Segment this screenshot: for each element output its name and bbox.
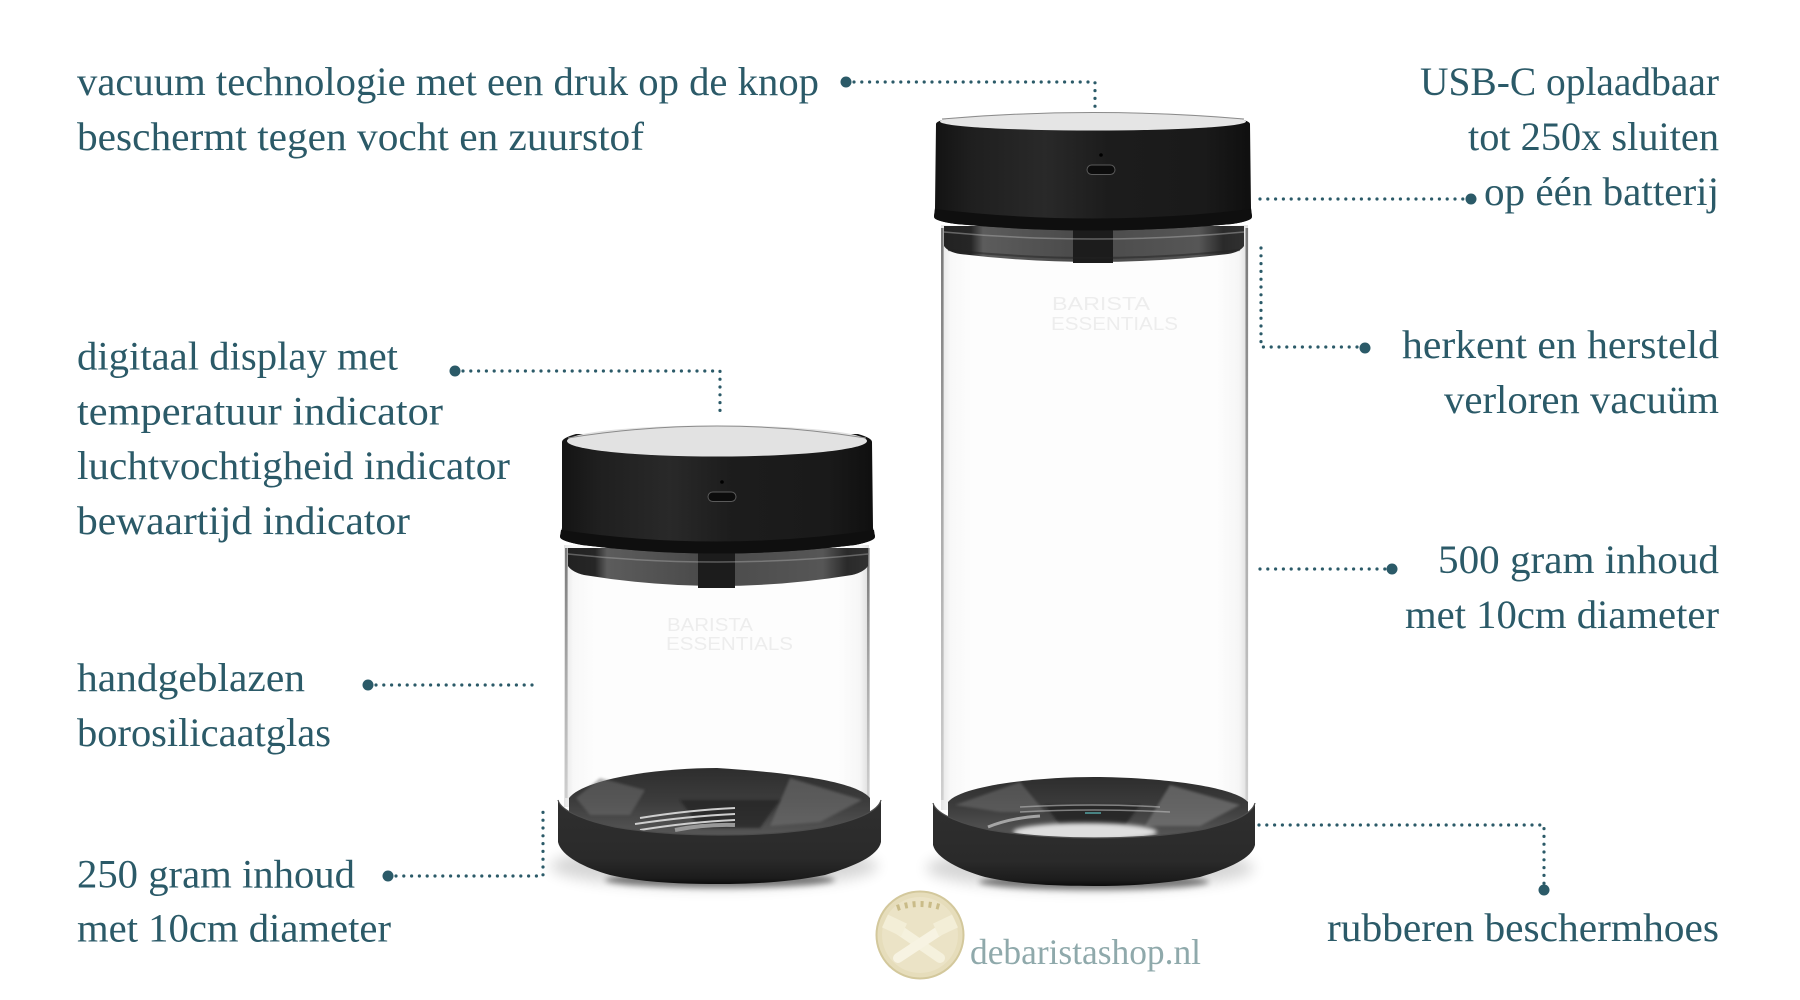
text block: handgeblazen xyxy=(77,655,305,700)
glass brand text xyxy=(666,615,793,654)
callout: recover vacuum xyxy=(1261,248,1719,422)
glass body xyxy=(941,225,1248,810)
leader line xyxy=(450,366,720,411)
callout: hand blown glass xyxy=(77,655,533,755)
icon: gold coin with crossed tampers xyxy=(876,892,964,978)
text block: verloren vacuüm xyxy=(1444,377,1719,422)
text block: 500 gram inhoud xyxy=(1438,537,1719,582)
callout: digital display xyxy=(77,334,720,543)
callout: vacuum technology xyxy=(77,59,1095,159)
lid seal band xyxy=(944,226,1244,263)
leader line xyxy=(1260,564,1398,574)
text block: op één batterij xyxy=(1484,169,1719,214)
text block: USB-C oplaadbaar xyxy=(1420,59,1719,104)
jar shadow xyxy=(926,846,1254,890)
leader line xyxy=(1260,194,1476,204)
text block xyxy=(1420,59,1719,214)
text block: met 10cm diameter xyxy=(1405,592,1719,637)
logo text: debaristashop.nl xyxy=(970,932,1201,972)
text block: borosilicaatglas xyxy=(77,710,331,755)
text block: met 10cm diameter xyxy=(77,906,391,950)
callout: rubber cover xyxy=(1259,825,1719,950)
small jar 250 gram xyxy=(550,426,881,888)
jar shadow xyxy=(550,844,878,888)
text block: 250 gram inhoud xyxy=(77,852,355,896)
text block: temperatuur indicator xyxy=(77,388,443,434)
base interior xyxy=(948,777,1248,845)
text block xyxy=(77,334,510,543)
text block: herkent en hersteld xyxy=(1402,322,1719,367)
tall jar 500 gram xyxy=(926,112,1255,890)
leader line xyxy=(382,812,543,882)
text block xyxy=(77,655,331,755)
text block: digitaal display met xyxy=(77,334,398,378)
text block xyxy=(1405,537,1719,637)
text block: vacuum technologie met een druk op de knop xyxy=(77,59,819,104)
logo: debaristashop xyxy=(876,892,1201,978)
text block: luchtvochtigheid indicator xyxy=(77,443,510,488)
rubber base xyxy=(558,800,881,884)
text block xyxy=(77,852,391,950)
text block: rubberen beschermhoes xyxy=(1327,905,1719,950)
glass brand text: BARISTA xyxy=(667,615,753,635)
text block: beschermt tegen vocht en zuurstof xyxy=(77,114,645,159)
leader line xyxy=(1261,248,1370,354)
base interior xyxy=(569,768,870,845)
lid xyxy=(934,112,1252,230)
text block xyxy=(1402,322,1719,422)
callout: USB-C xyxy=(1260,59,1719,214)
glass brand text: BARISTA xyxy=(1052,294,1150,314)
glass brand text: ESSENTIALS xyxy=(666,634,793,654)
callout: 500 gram xyxy=(1260,537,1719,637)
glass brand text xyxy=(1051,294,1178,334)
leader line xyxy=(362,680,533,690)
rubber base xyxy=(933,803,1255,886)
glass brand text: ESSENTIALS xyxy=(1051,314,1178,334)
text block: tot 250x sluiten xyxy=(1468,114,1719,159)
lid xyxy=(560,426,875,554)
callout: 250 gram xyxy=(77,812,543,950)
lid seal band xyxy=(568,548,868,588)
leader line xyxy=(1259,825,1550,896)
text block xyxy=(77,59,819,159)
glass body xyxy=(564,545,870,807)
text block: bewaartijd indicator xyxy=(77,498,410,543)
leader line xyxy=(840,76,1095,109)
